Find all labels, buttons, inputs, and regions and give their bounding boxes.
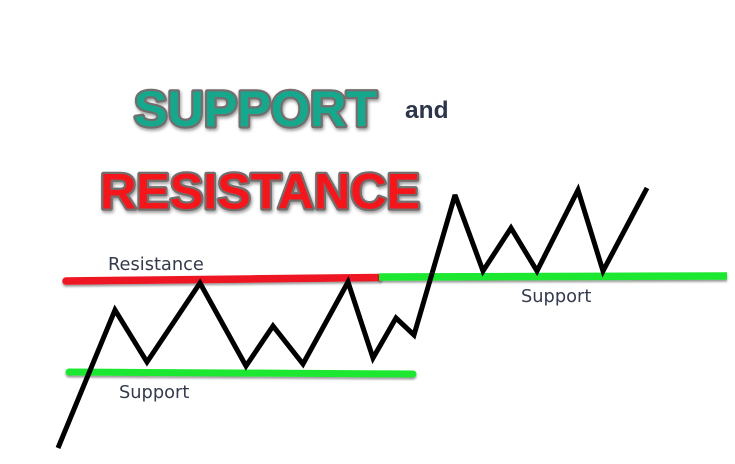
upper support line	[379, 276, 727, 277]
label: upper Support: Support	[521, 286, 591, 307]
price line chart	[58, 188, 647, 448]
lower support line	[69, 372, 413, 374]
title: SUPPORT: SUPPORT	[134, 81, 377, 137]
title: and: and	[405, 97, 449, 124]
resistance line	[66, 278, 379, 281]
title: RESISTANCE: RESISTANCE	[100, 164, 420, 220]
label: Resistance: Resistance	[108, 254, 204, 275]
label: lower Support: Support	[119, 382, 189, 403]
